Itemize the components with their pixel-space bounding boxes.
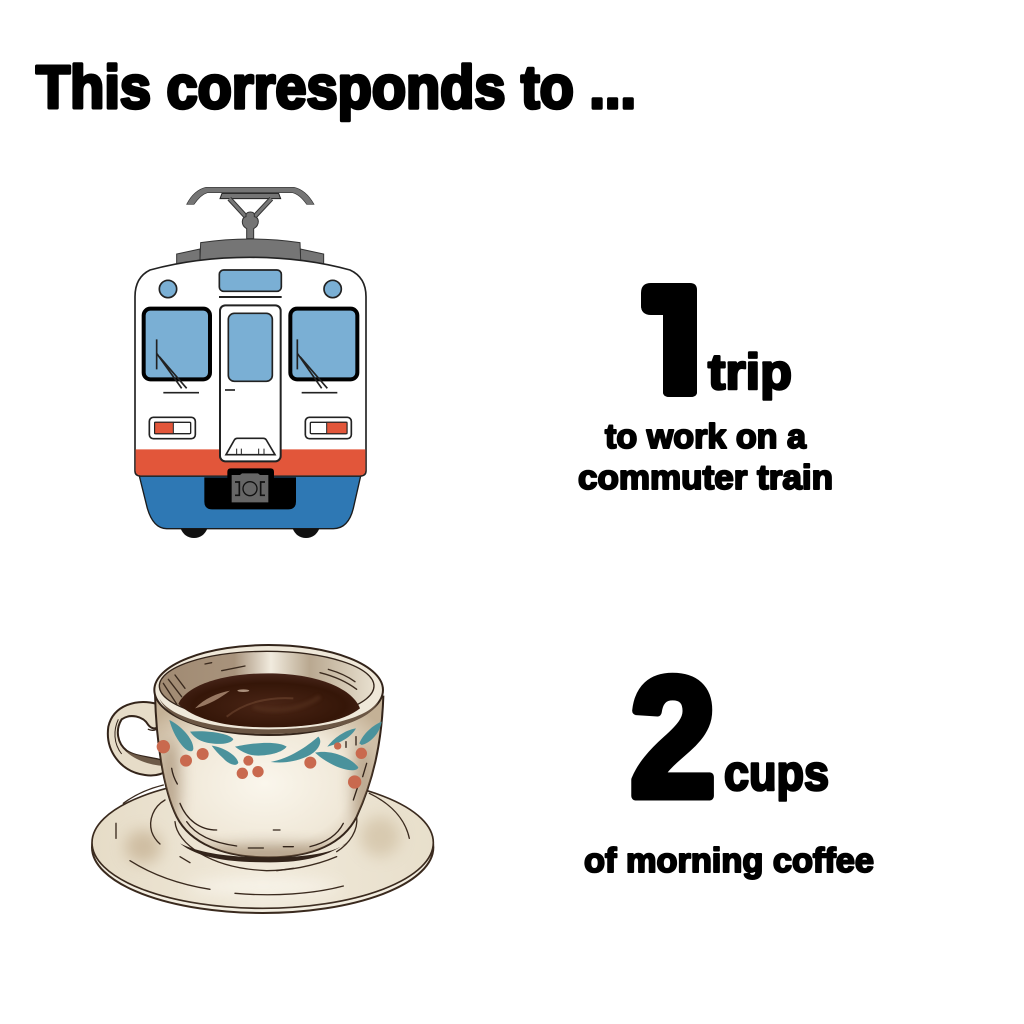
label: trip: trip (708, 344, 792, 400)
coupler (204, 468, 296, 509)
cup rim and inside (154, 645, 383, 735)
label: cups: cups (724, 745, 829, 801)
pantograph (187, 187, 314, 239)
text: to work on a commuter train (578, 418, 833, 497)
roof (177, 239, 324, 264)
destination sign (219, 270, 281, 291)
number: 2: 2 (630, 643, 716, 833)
cup body (155, 693, 383, 862)
marker lamps (159, 280, 341, 298)
door (220, 305, 281, 461)
text: to work on a commuter train: commuter train (578, 459, 833, 497)
red stripe (136, 449, 365, 475)
lower blue body (139, 476, 361, 529)
right window (290, 309, 357, 393)
saucer (92, 777, 433, 913)
floral band (157, 720, 382, 789)
wheels (181, 529, 319, 538)
icon: commuter train (135, 187, 366, 538)
right tail light (305, 417, 351, 439)
title: This corresponds to ... (36, 54, 636, 121)
white body (135, 257, 366, 476)
coffee (178, 673, 360, 727)
text: of morning coffee: of morning coffee (584, 842, 874, 880)
handle (108, 702, 171, 775)
left window (144, 309, 210, 393)
text: to work on a commuter train: to work on a (605, 418, 807, 456)
left tail light (149, 417, 195, 439)
number: 1: 1 (622, 243, 720, 438)
icon: coffee cup on saucer (92, 645, 433, 913)
infographic canvas (35, 62, 874, 914)
